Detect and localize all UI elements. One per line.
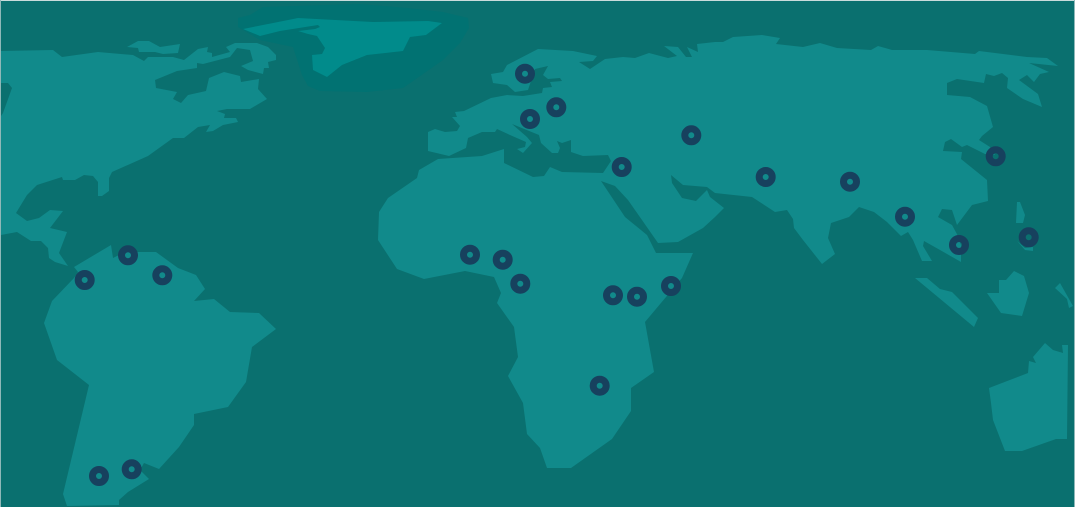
- marker: Scandinavia: [518, 67, 532, 80]
- marker: Zimbabwe: [593, 379, 606, 392]
- marker: Philippines: [1022, 231, 1035, 244]
- marker: Pakistan: [759, 170, 772, 184]
- marker: Ethiopia: [630, 290, 644, 303]
- marker: Eastern Europe: [550, 101, 563, 114]
- marker: Guinea: [464, 248, 476, 261]
- South America: [44, 245, 276, 506]
- location markers: [78, 67, 1035, 482]
- marker: South Sudan: [606, 289, 620, 302]
- marker: Nepal: [844, 175, 856, 188]
- Sumatra: [915, 278, 978, 327]
- Alaska coast inlet: [1, 83, 12, 116]
- Japan: [1016, 202, 1025, 223]
- Australia: [989, 343, 1068, 451]
- Africa and Eurasia: [378, 35, 1058, 468]
- Southern Japan islet: [1017, 241, 1033, 251]
- North America: [1, 43, 276, 266]
- marker: Vietnam: [952, 238, 966, 252]
- marker: Korea: [989, 150, 1002, 163]
- marker: Middle East: [615, 160, 628, 174]
- marker: Nigeria: [514, 277, 527, 290]
- marker: Ghana: [496, 253, 509, 266]
- Arctic island: [127, 41, 180, 54]
- marker: Central Europe: [524, 112, 536, 126]
- marker: Somalia: [664, 280, 678, 292]
- Greenland halo: [238, 4, 469, 92]
- marker: Central Asia: [685, 129, 698, 142]
- New Guinea: [1055, 283, 1073, 308]
- marker: Guyana: [156, 269, 169, 282]
- marker: Myanmar: [898, 210, 912, 223]
- marker: Colombia: [78, 274, 91, 286]
- Borneo: [987, 271, 1029, 316]
- Greenland: [243, 18, 442, 77]
- marker: Venezuela: [122, 249, 134, 262]
- marker: Uruguay: [125, 463, 138, 476]
- marker: Chile: [92, 470, 106, 482]
